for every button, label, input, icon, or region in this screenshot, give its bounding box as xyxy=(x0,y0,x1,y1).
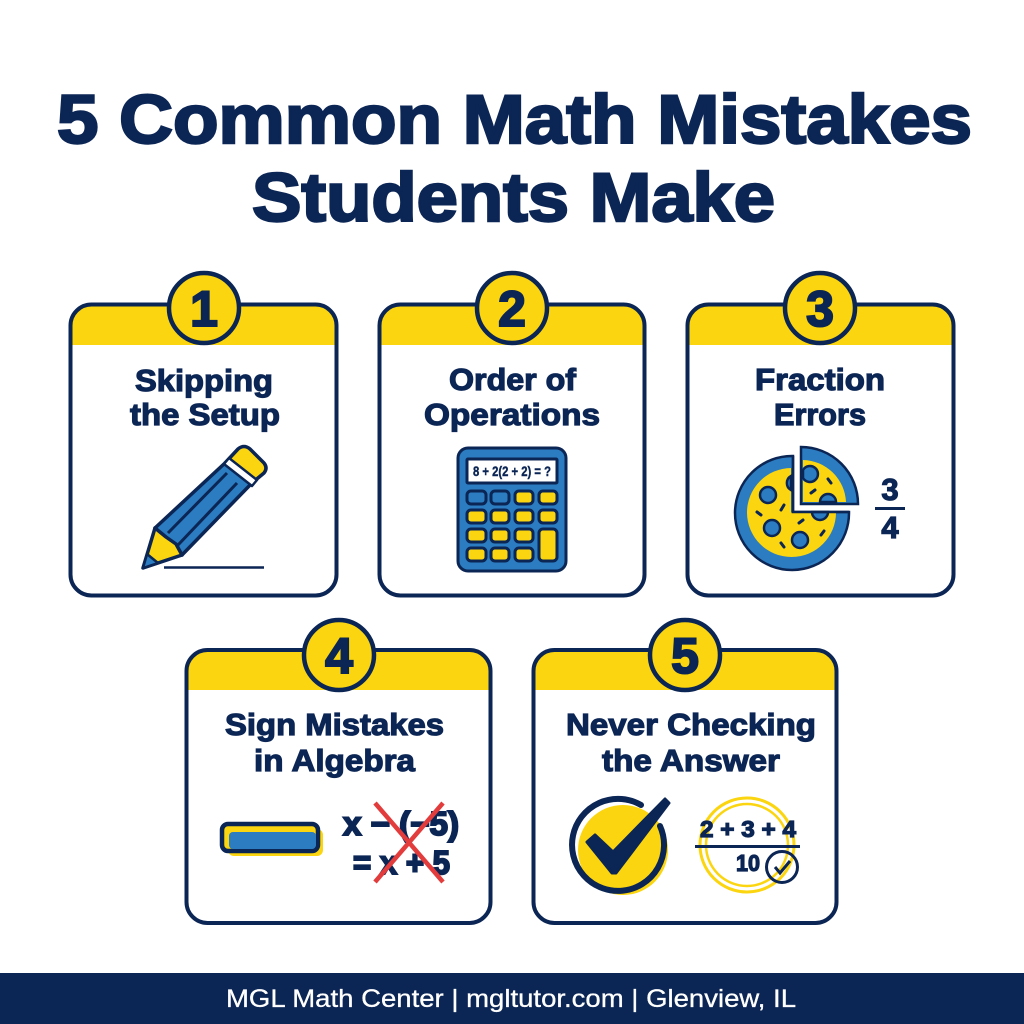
checked sum in circle: 2 + 3 + 4 xyxy=(700,816,796,842)
heading: never checking the answer xyxy=(566,707,816,778)
icon: calculator xyxy=(458,448,566,571)
title xyxy=(57,81,972,236)
icon: calculator: 8 + 2(2 + 2) = ? xyxy=(473,464,551,479)
number badge 2 xyxy=(477,273,547,343)
heading: order of operations xyxy=(424,362,600,432)
number badge 1 xyxy=(169,273,239,343)
number badge 2: 2 xyxy=(498,281,526,337)
icon: pizza with missing slice xyxy=(735,447,858,570)
number badge 4: 4 xyxy=(325,628,353,684)
footer bar: MGL Math Center | mgltutor.com | Glenview, IL xyxy=(226,985,796,1013)
heading: order of operations: Order of xyxy=(449,362,577,397)
heading: fraction errors: Fraction xyxy=(755,362,885,397)
heading: never checking the answer: the Answer xyxy=(602,743,780,778)
heading: order of operations: Operations xyxy=(424,397,600,432)
icon: large check mark xyxy=(572,799,669,895)
number badge 3 xyxy=(785,273,855,343)
number badge 5 xyxy=(650,620,720,690)
heading: sign mistakes in algebra: in Algebra xyxy=(254,743,416,778)
equation with red cross xyxy=(343,803,459,882)
panel: card 3 fraction errors xyxy=(688,273,954,596)
number badge 5: 5 xyxy=(671,628,699,684)
equation with red cross: = x + 5 xyxy=(353,844,450,881)
panel: card 2 order of operations xyxy=(380,273,644,596)
fraction three quarters: 3 xyxy=(881,472,899,507)
panel: card 4 sign mistakes in algebra xyxy=(186,620,490,923)
heading: fraction errors: Errors xyxy=(774,397,866,432)
fraction three quarters xyxy=(875,472,905,545)
footer bar xyxy=(0,973,1024,1024)
number badge 1: 1 xyxy=(190,281,218,337)
heading: sign mistakes in algebra: Sign Mistakes xyxy=(225,707,444,742)
icon: pencil xyxy=(143,446,266,568)
heading: fraction errors xyxy=(755,362,885,432)
fraction three quarters: 4 xyxy=(881,510,899,545)
number badge 4 xyxy=(304,620,374,690)
heading: skipping the setup: Skipping xyxy=(135,363,273,398)
heading: sign mistakes in algebra xyxy=(225,707,444,778)
panel: card 5 never checking the answer xyxy=(534,620,836,923)
equation with red cross: x − (−5) xyxy=(343,805,459,842)
title: Students Make xyxy=(252,159,775,236)
heading: skipping the setup xyxy=(130,363,280,432)
heading: skipping the setup: the Setup xyxy=(130,397,280,432)
checked sum in circle: 10 xyxy=(736,850,760,876)
checked sum in circle xyxy=(695,798,800,892)
panel: card 1 skipping the setup xyxy=(70,273,336,596)
heading: never checking the answer: Never Checking xyxy=(566,707,816,742)
title: 5 Common Math Mistakes xyxy=(57,81,972,158)
number badge 3: 3 xyxy=(806,281,834,337)
icon: minus sign bar xyxy=(222,824,323,856)
